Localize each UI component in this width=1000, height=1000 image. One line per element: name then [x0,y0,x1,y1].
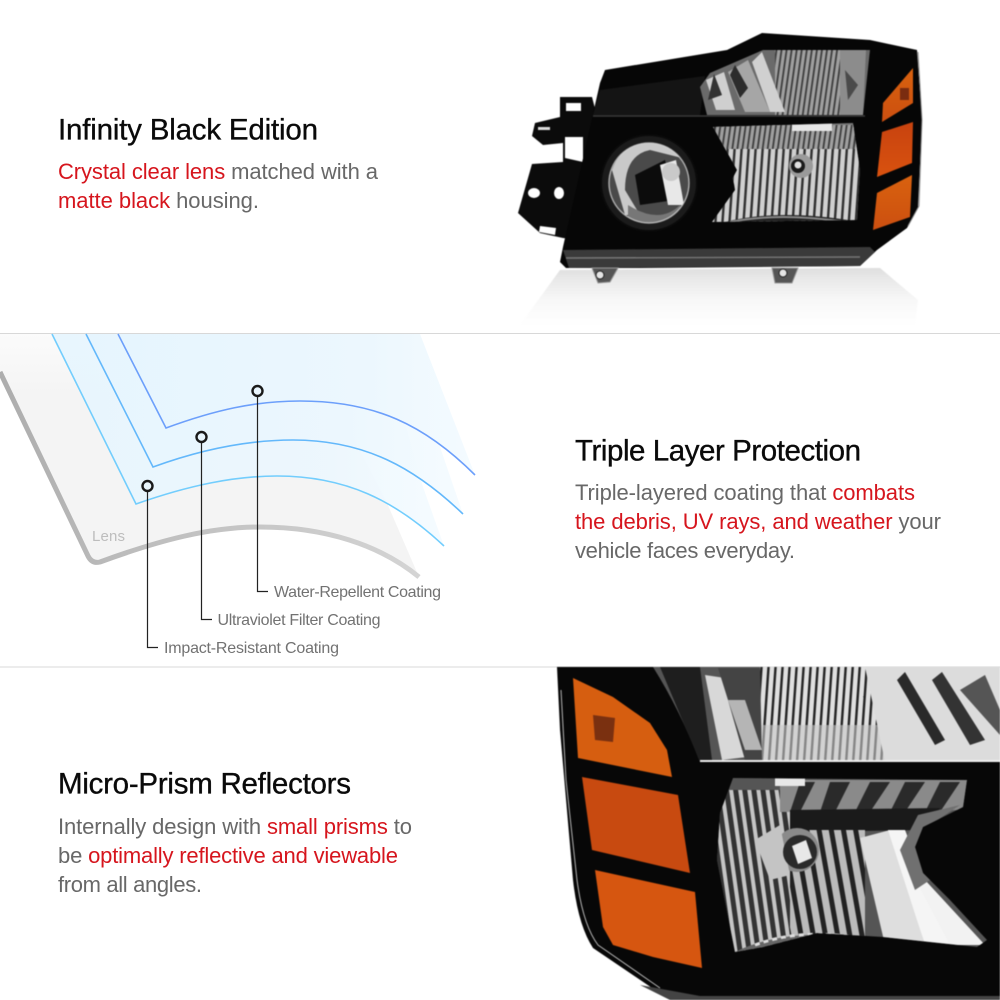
text block: triple-layered coating: Triple-layered coating that combats [575,480,915,505]
callout: ultraviolet filter coating: Ultraviolet Filter Coating [218,612,380,629]
heading: Triple Layer Protection: Triple Layer Protection [575,434,861,468]
image: headlight close-up [557,665,1000,1000]
callout: impact-resistant coating [142,481,339,657]
divider [0,666,1000,668]
text block: triple-layered coating: the debris, UV rays, and weather your [575,509,941,534]
coating pane 3: water-repellent [118,334,475,475]
heading: Infinity Black Edition: Infinity Black Edition [58,114,318,146]
icon: mounting tabs [592,268,798,283]
heading: Micro-Prism Reflectors: Micro-Prism Reflectors [58,768,351,800]
diagram: coating layers [0,334,475,657]
text block: internally design: be optimally reflective and viewable [58,843,398,868]
divider [0,333,1000,334]
callout: water-repellent coating [252,386,441,601]
lens layer: Lens [92,528,125,545]
coating pane 2: ultraviolet filter [86,334,463,514]
panel: infinity black edition [58,33,922,325]
text block: internally design: from all angles. [58,872,202,897]
panel: triple layer protection [0,334,941,657]
text block: internally design [58,814,412,897]
text block: crystal clear lens: matte black housing. [58,188,259,213]
image: black headlight with reflection [518,33,922,325]
panel: micro-prism reflectors [58,665,1000,1000]
callout: impact-resistant coating: Impact-Resistant Coating [164,640,339,657]
text block: triple-layered coating [575,480,941,563]
amber turn signal lenses [873,68,913,230]
callout: ultraviolet filter coating [196,432,380,629]
text block: crystal clear lens: Crystal clear lens matched with a [58,159,379,184]
coating pane 1: impact-resistant [52,334,444,546]
text block: crystal clear lens [58,159,379,213]
text block: triple-layered coating: vehicle faces everyday. [575,538,795,563]
text block: internally design: Internally design with small prisms to [58,814,412,839]
amber turn signal lenses [573,678,702,968]
lens layer [0,334,419,577]
callout: water-repellent coating: Water-Repellent Coating [274,584,441,601]
